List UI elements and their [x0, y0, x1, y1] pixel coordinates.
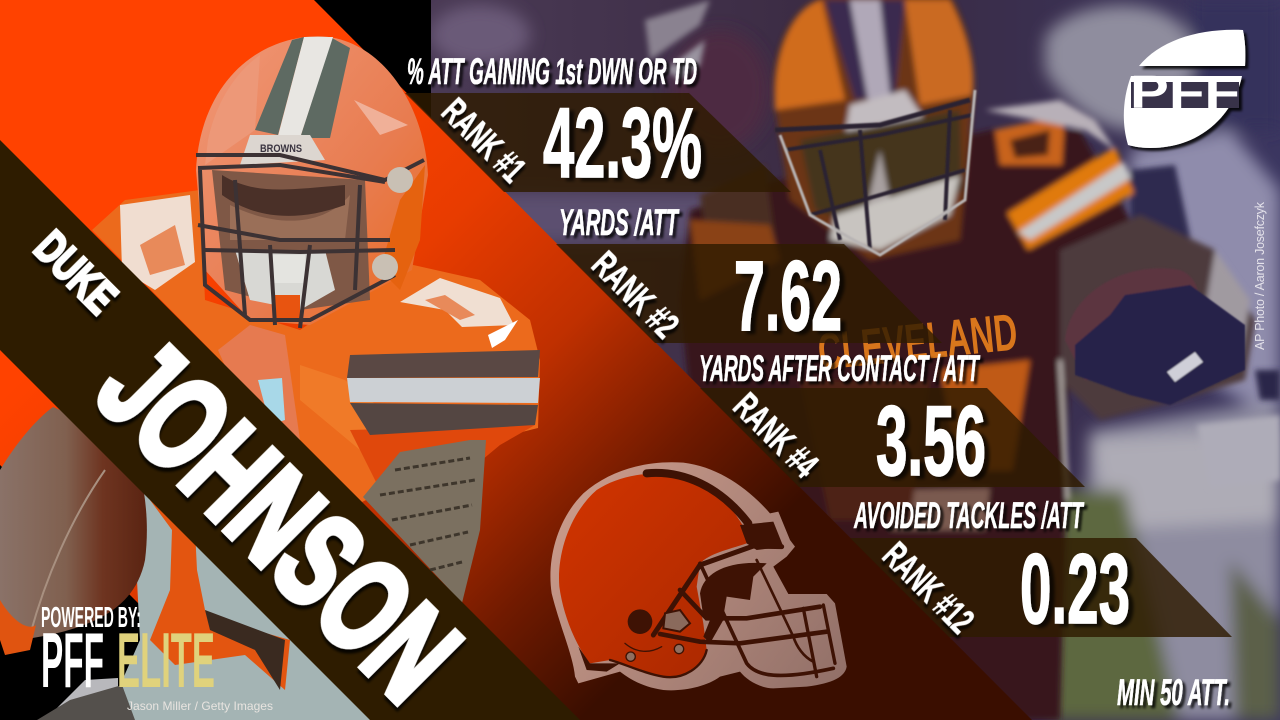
- football: [0, 407, 147, 640]
- left player cut-out: [0, 36, 540, 720]
- black lower-left triangle: [0, 465, 255, 720]
- helmet clips: [387, 167, 413, 193]
- stat label: AVOIDED TACKLES /ATT: [853, 495, 1085, 536]
- helmet stripes: [255, 37, 304, 135]
- panel: stat 1: [405, 51, 791, 198]
- brown diagonal name band: [0, 140, 580, 720]
- sleeve bars: [347, 350, 540, 378]
- helmet: [774, 0, 974, 260]
- tattooed arm: [363, 440, 486, 603]
- face mask: [196, 155, 424, 328]
- photo credit: AP: AP Photo / Aaron Josefczyk: [1253, 201, 1267, 350]
- stat rank: RANK #12: [875, 534, 982, 641]
- logo on sleeve: [488, 320, 518, 348]
- jersey lettering: CLEVELAND: [815, 303, 1020, 382]
- stat label: YARDS AFTER CONTACT / ATT: [699, 348, 981, 389]
- PFF logo: PFF: [1130, 66, 1240, 118]
- jersey lower body: [118, 440, 370, 720]
- panel: stat 3: [699, 348, 1085, 496]
- stat value: 42.3%: [543, 87, 702, 198]
- stat rank: RANK #2: [584, 243, 687, 346]
- shoulder number: [995, 115, 1065, 165]
- powered by PFF Elite badge: PFF: [41, 616, 104, 704]
- helmet nameplate: [240, 135, 325, 165]
- panel: stat 4: [850, 495, 1232, 644]
- powered by PFF Elite badge: POWERED BY:: [41, 602, 141, 634]
- first name: DUKE: DUKE: [25, 221, 127, 323]
- torso: [680, 130, 1130, 720]
- panel: stat 2: [556, 202, 942, 351]
- photo credit: Getty: Jason Miller / Getty Images: [127, 699, 273, 713]
- glove wrap: [50, 678, 118, 720]
- sleeve stripes: [1007, 147, 1134, 250]
- stat value: 3.56: [876, 385, 986, 496]
- jersey upper body: [92, 190, 540, 502]
- stat rank: RANK #4: [726, 385, 826, 486]
- stat value: 0.23: [1020, 533, 1130, 644]
- face: [212, 170, 370, 310]
- lower jersey numbers: [940, 360, 1030, 470]
- arm: [1060, 215, 1255, 420]
- stat label: YARDS /ATT: [559, 202, 680, 243]
- helmet: [196, 36, 428, 328]
- hand: [218, 325, 300, 440]
- helmet: BROWNS: [260, 143, 302, 155]
- Browns helmet logo: [550, 462, 847, 690]
- infographic canvas: ELITE: [117, 616, 215, 704]
- background: opposing player: [1045, 6, 1195, 131]
- stat rank: RANK #1: [434, 90, 534, 190]
- visor: [800, 110, 962, 225]
- PFF logo: [1124, 30, 1245, 148]
- hand in background: [645, 0, 710, 60]
- stat value: 7.62: [734, 240, 842, 351]
- near shoulder: [697, 164, 775, 230]
- opposing player glove: [1197, 415, 1280, 488]
- ball and glove: [1065, 268, 1245, 405]
- shoulder numbers: [120, 195, 195, 290]
- background photo: running back blurred: [430, 0, 1280, 720]
- stat label: % ATT GAINING 1st DWN OR TD: [407, 51, 697, 92]
